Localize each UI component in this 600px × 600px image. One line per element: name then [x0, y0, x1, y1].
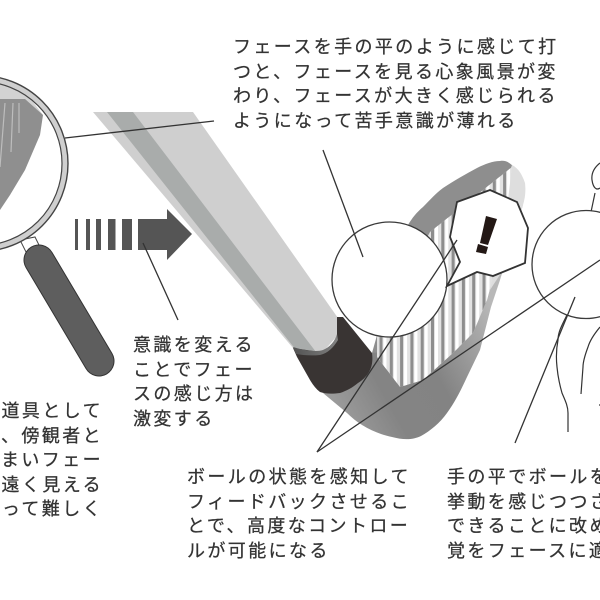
- speech bubble with exclamation: [447, 190, 528, 286]
- golfer outline: [556, 163, 600, 432]
- magnifier lens: [0, 76, 68, 252]
- text: face feels like palm: わり、フェースが大きく感じられる: [233, 86, 558, 106]
- exclamation mark: [476, 216, 497, 254]
- text: face feels like palm: ようになって苦手意識が薄れる: [233, 111, 518, 131]
- text: right clipped caption: [447, 467, 600, 561]
- text: left clipped caption: って難しく: [2, 499, 103, 519]
- text: change awareness: ことでフェー: [133, 360, 255, 380]
- text: change awareness: [133, 335, 255, 429]
- text: ball feedback: ルが可能になる: [187, 541, 330, 561]
- magnifier handle: [20, 237, 99, 361]
- text: ball feedback: [187, 467, 411, 561]
- golf club head: [323, 160, 525, 439]
- leader lines: [65, 121, 600, 452]
- circle: palm on golfer: [532, 210, 600, 318]
- text: left clipped caption: [1, 401, 103, 519]
- text: change awareness: 意識を変える: [133, 335, 255, 355]
- text: left clipped caption: 道具として: [2, 401, 103, 421]
- golf club shaft: [93, 112, 338, 352]
- text: ball feedback: ボールの状態を感知して: [187, 467, 411, 487]
- text: face feels like palm: [233, 37, 558, 131]
- club grip: [293, 317, 372, 394]
- dashed arrow: [75, 209, 192, 260]
- face grooves: [377, 168, 511, 387]
- illustration: [0, 77, 600, 452]
- text: ball feedback: フィードバックさせるこ: [187, 492, 411, 512]
- text: left clipped caption: 、傍観者と: [1, 426, 103, 446]
- circle: palm on face: [332, 222, 447, 337]
- text: left clipped caption: まいフェー: [1, 450, 103, 470]
- text: face feels like palm: つと、フェースを見る心象風景が変: [233, 62, 558, 82]
- text: ball feedback: とで、高度なコントロー: [187, 516, 410, 536]
- text: change awareness: 激変する: [133, 409, 215, 429]
- text: change awareness: スの感じ方は: [133, 384, 255, 404]
- text: left clipped caption: 遠く見える: [2, 475, 103, 495]
- text: face feels like palm: フェースを手の平のように感じて打: [233, 37, 558, 57]
